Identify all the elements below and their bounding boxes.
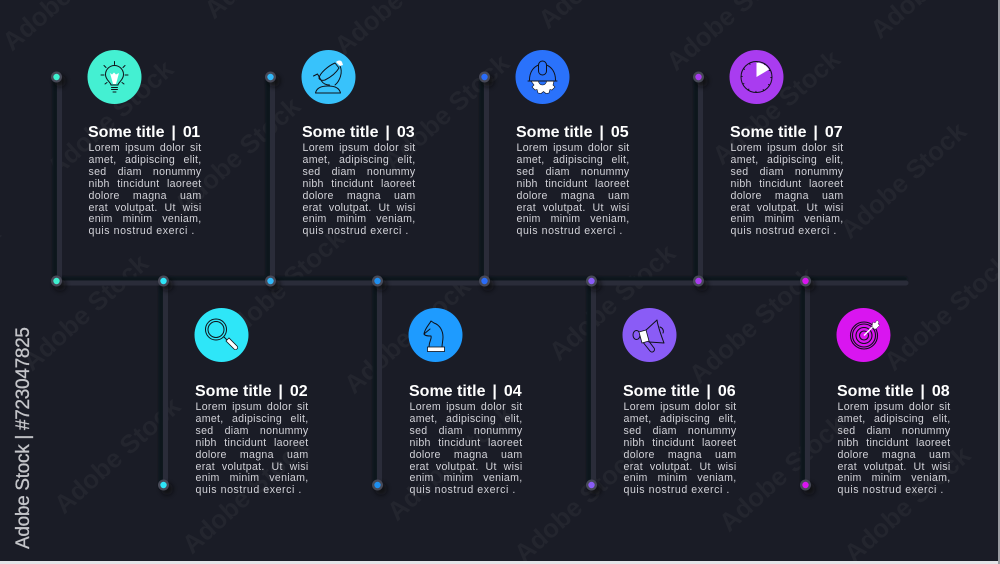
text 05: enim minim veniam,	[516, 213, 630, 225]
text 01: erat volutpat. Ut wisi	[88, 202, 202, 214]
text 05: dolore magna uam	[516, 190, 630, 202]
text 04: amet, adipiscing elit,	[410, 413, 522, 425]
watermark pattern: Adobe Stock	[41, 53, 180, 182]
block 04	[409, 382, 522, 496]
block 03	[302, 124, 416, 237]
text 04: quis nostrud exerci .	[410, 484, 516, 496]
text 05: amet, adipiscing elit,	[516, 154, 630, 166]
heading 04: Some title | 04	[409, 382, 522, 400]
text 02: erat volutpat. Ut wisi	[196, 461, 308, 473]
watermark pattern: Adobe Stock	[48, 390, 187, 519]
text 01: quis nostrud exerci .	[88, 225, 195, 237]
text 06: sed diam nonummy	[624, 425, 736, 437]
text 08: dolore magna uam	[838, 449, 950, 461]
heading 02: Some title | 02	[195, 382, 308, 400]
block 08	[837, 382, 950, 496]
watermark pattern: Adobe Stock	[706, 43, 846, 171]
icon: magnifying glass	[194, 308, 248, 362]
heading 03: Some title | 03	[302, 124, 415, 140]
text 03: amet, adipiscing elit,	[302, 154, 416, 166]
text 03: erat volutpat. Ut wisi	[302, 202, 416, 214]
text 03: enim minim veniam,	[302, 213, 416, 225]
text 02: enim minim veniam,	[196, 472, 308, 484]
text 04: Lorem ipsum dolor sit	[410, 401, 522, 413]
text 06	[624, 401, 736, 496]
text 01: sed diam nonummy	[88, 166, 202, 178]
text 08: Lorem ipsum dolor sit	[838, 401, 950, 413]
block 01	[88, 124, 202, 237]
text 05: sed diam nonummy	[516, 166, 630, 178]
text 04: nibh tincidunt laoreet	[410, 437, 522, 449]
text 07: Lorem ipsum dolor sit	[730, 142, 844, 154]
block 05	[516, 124, 630, 237]
icon: helmet and gear	[516, 50, 570, 104]
text 05: quis nostrud exerci .	[516, 225, 623, 237]
text 01	[88, 142, 202, 237]
text 03: Lorem ipsum dolor sit	[302, 142, 416, 154]
text 02: Lorem ipsum dolor sit	[196, 401, 308, 413]
text 07: erat volutpat. Ut wisi	[730, 202, 844, 214]
heading 08: Some title | 08	[837, 382, 950, 400]
text 07: nibh tincidunt laoreet	[730, 178, 844, 190]
text 01: Lorem ipsum dolor sit	[88, 142, 202, 154]
icon: megaphone	[622, 308, 676, 362]
text 01: enim minim veniam,	[88, 213, 202, 225]
text 03: sed diam nonummy	[302, 166, 416, 178]
text 01: nibh tincidunt laoreet	[88, 178, 202, 190]
text 06: dolore magna uam	[624, 449, 736, 461]
watermark pattern: Adobe Stock	[381, 397, 520, 526]
watermark pattern: Adobe Stock	[16, 247, 155, 376]
text 04: dolore magna uam	[410, 449, 522, 461]
text 06: enim minim veniam,	[624, 472, 736, 484]
text 02: dolore magna uam	[196, 449, 308, 461]
text 08: nibh tincidunt laoreet	[838, 437, 950, 449]
text 05	[516, 142, 630, 237]
text 06: amet, adipiscing elit,	[624, 413, 736, 425]
text 07: amet, adipiscing elit,	[730, 154, 844, 166]
text 07	[730, 142, 844, 237]
text 06: nibh tincidunt laoreet	[624, 437, 736, 449]
heading 07: Some title | 07	[730, 124, 843, 140]
icon: target with dart	[836, 308, 890, 362]
bottom edge strip	[0, 561, 1000, 564]
block 07	[730, 124, 844, 237]
text 06: erat volutpat. Ut wisi	[624, 461, 736, 473]
text 02	[196, 401, 308, 496]
watermark pattern: Adobe Stock	[377, 47, 516, 176]
text 06: quis nostrud exerci .	[624, 484, 730, 496]
text 08: enim minim veniam,	[838, 472, 950, 484]
text 04	[410, 401, 522, 496]
block 02	[195, 382, 308, 496]
text 02: sed diam nonummy	[196, 425, 308, 437]
watermark pattern: Adobe Stock	[212, 222, 351, 351]
text 05: erat volutpat. Ut wisi	[516, 202, 630, 214]
watermark pattern: Adobe Stock	[543, 237, 682, 366]
text 06: Lorem ipsum dolor sit	[624, 401, 736, 413]
text 05: Lorem ipsum dolor sit	[516, 142, 630, 154]
text 07: sed diam nonummy	[730, 166, 844, 178]
right edge strip	[998, 0, 1000, 564]
text 03: quis nostrud exerci .	[302, 225, 409, 237]
text 07: quis nostrud exerci .	[730, 225, 837, 237]
text 01: dolore magna uam	[88, 190, 202, 202]
watermark pattern: Adobe Stock	[683, 260, 822, 389]
text 02: nibh tincidunt laoreet	[196, 437, 308, 449]
icon: chess knight	[408, 308, 462, 362]
text 08: amet, adipiscing elit,	[838, 413, 950, 425]
icon: light bulb	[88, 50, 142, 104]
watermark pattern: Adobe Stock	[168, 90, 307, 219]
watermark pattern: Adobe Stock	[713, 408, 852, 537]
text 08: erat volutpat. Ut wisi	[838, 461, 950, 473]
icon: clock timer	[730, 50, 784, 104]
heading 06: Some title | 06	[623, 382, 736, 400]
text 07: dolore magna uam	[730, 190, 844, 202]
text 04: erat volutpat. Ut wisi	[410, 461, 522, 473]
text 04: enim minim veniam,	[410, 472, 522, 484]
icon: microscope	[302, 50, 356, 104]
timeline node dots	[51, 72, 815, 495]
watermark pattern: Adobe Stock	[176, 430, 315, 559]
text 03	[302, 142, 416, 237]
stock id side label: Adobe Stock | #723047825	[13, 327, 34, 549]
heading 05: Some title | 05	[516, 124, 629, 140]
text 02: quis nostrud exerci .	[196, 484, 302, 496]
block 06	[623, 382, 736, 496]
text 08: sed diam nonummy	[838, 425, 950, 437]
text 03: dolore magna uam	[302, 190, 416, 202]
text 03: nibh tincidunt laoreet	[302, 178, 416, 190]
text 05: nibh tincidunt laoreet	[516, 178, 630, 190]
text 02: amet, adipiscing elit,	[196, 413, 308, 425]
text 01: amet, adipiscing elit,	[88, 154, 202, 166]
text 04: sed diam nonummy	[410, 425, 522, 437]
text 08	[838, 401, 950, 496]
watermark pattern: Adobe Stock	[338, 270, 477, 399]
watermark pattern: Adobe Stock	[834, 115, 973, 244]
text 08: quis nostrud exerci .	[838, 484, 944, 496]
text 07: enim minim veniam,	[730, 213, 844, 225]
timeline connector lines	[55, 80, 906, 487]
heading 01: Some title | 01	[88, 124, 200, 140]
